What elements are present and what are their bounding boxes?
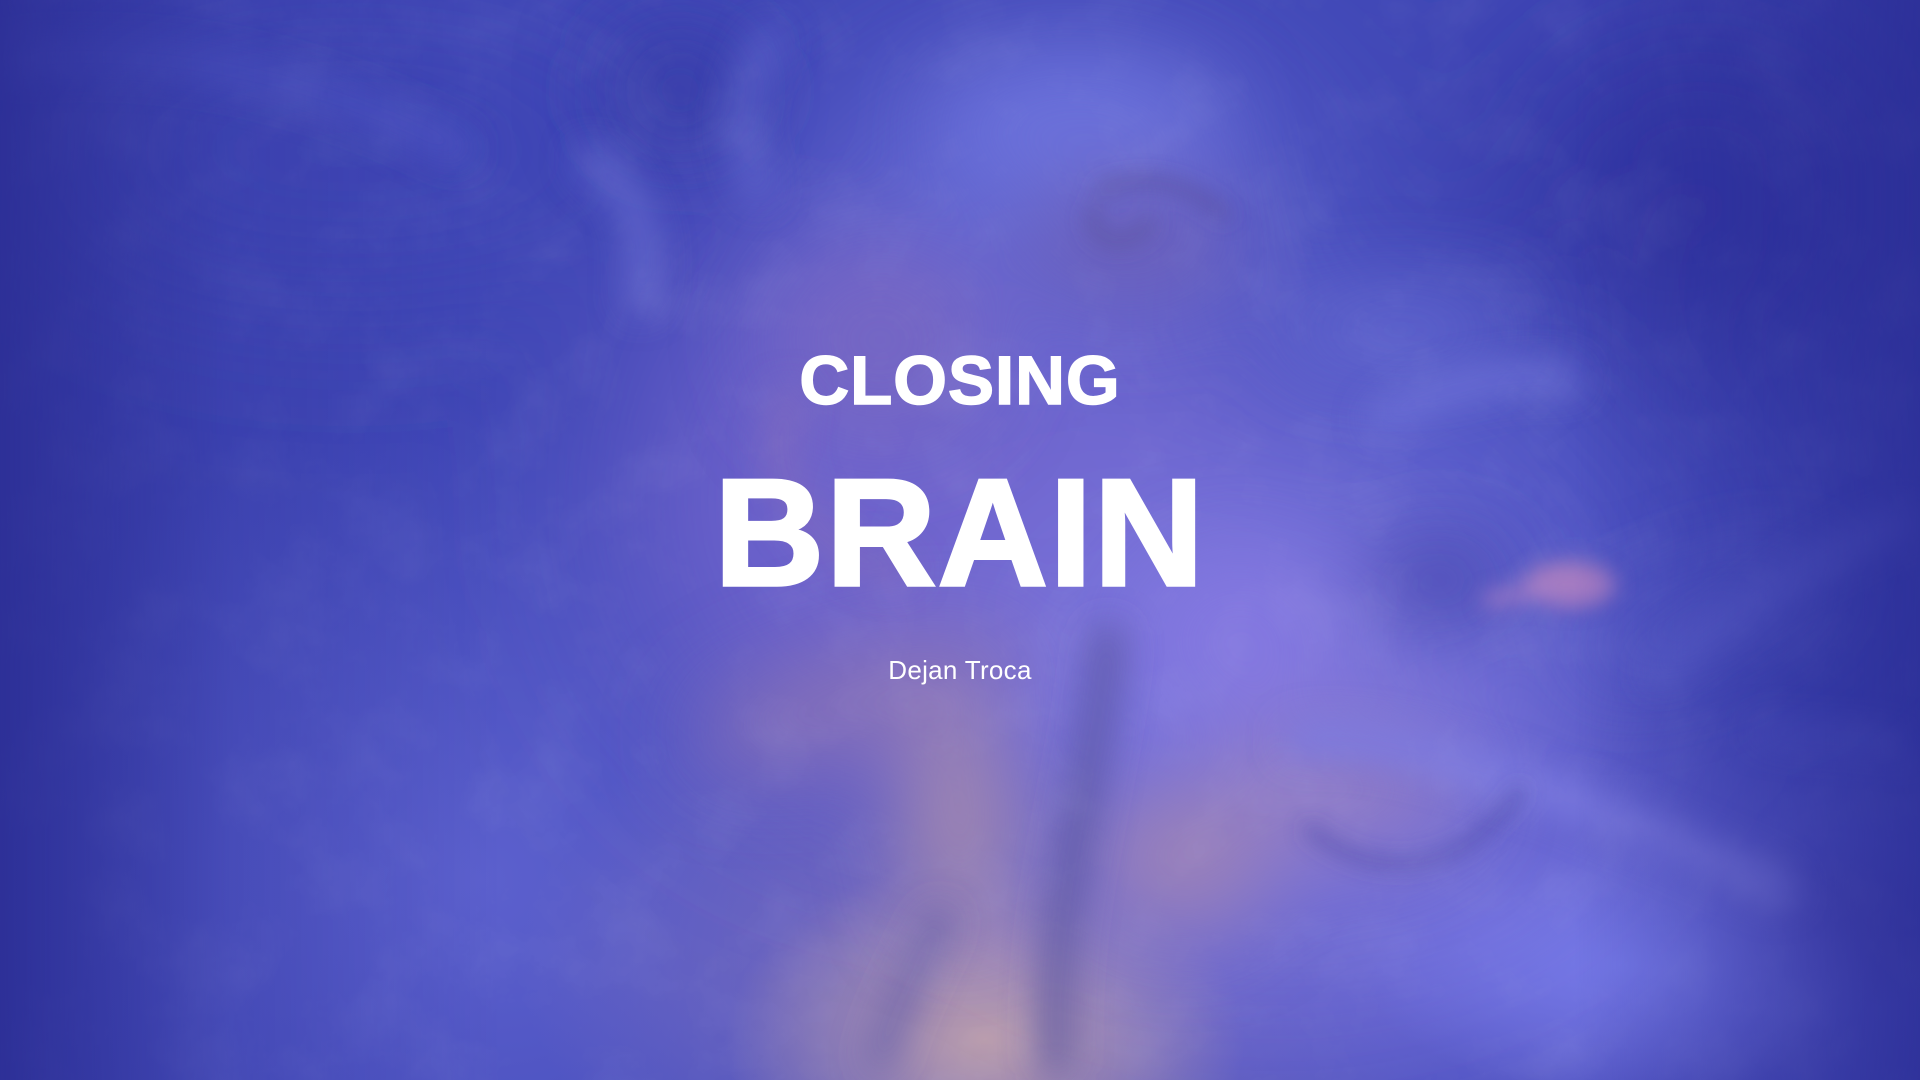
heading: brain: BRAIN: [714, 448, 1206, 618]
author name: Dejan Troca: [888, 655, 1032, 685]
heading: closing: CLOSING: [799, 342, 1121, 419]
